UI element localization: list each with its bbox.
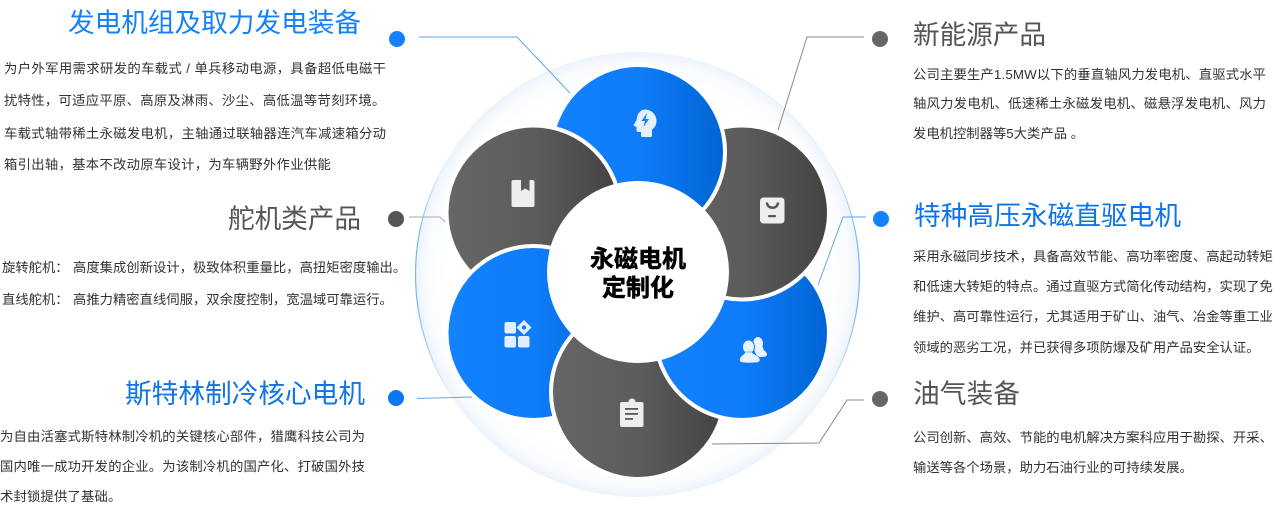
connector: top-right gray xyxy=(778,37,864,130)
panel: generator sets xyxy=(4,8,386,172)
petal: top blue xyxy=(553,67,723,237)
heading: 斯特林制冷核心电机 xyxy=(125,379,365,409)
icon: bookmark box xyxy=(512,180,534,207)
dot: bottom-right xyxy=(872,391,888,407)
text block: 旋转舵机： xyxy=(2,260,69,275)
dot: mid-right xyxy=(873,211,889,227)
panel: stirling cooler motors xyxy=(0,379,365,504)
panel: steering gear xyxy=(2,204,406,307)
text block xyxy=(913,248,1273,355)
heading: 发电机组及取力发电装备 xyxy=(68,8,361,38)
text block: 维护、高可靠性运行，尤其适用于矿山、油气、冶金等重工业 xyxy=(913,308,1273,324)
heading: 新能源产品 xyxy=(913,20,1046,50)
text block: 国内唯一成功开发的企业。为该制冷机的国产化、打破国外技 xyxy=(0,458,365,474)
text block: 轴风力发电机、低速稀土永磁发电机、磁悬浮发电机、风力 xyxy=(913,96,1266,111)
center title xyxy=(590,246,686,302)
text block xyxy=(4,60,386,172)
panel: oil and gas equipment xyxy=(913,379,1273,475)
center title: 定制化 xyxy=(602,275,674,302)
petal: top blue overlap xyxy=(625,67,727,210)
connector: bottom-right gray xyxy=(712,400,864,444)
text block: 发电机控制器等5大类产品 。 xyxy=(913,125,1084,141)
dot: top-left xyxy=(389,31,405,47)
center title: 永磁电机 xyxy=(590,246,686,273)
text block: 箱引出轴，基本不改动原车设计，为车辆野外作业供能 xyxy=(4,156,331,172)
center white circle xyxy=(547,181,729,363)
text block xyxy=(0,428,365,504)
text block: 车载式轴带稀土永磁发电机，主轴通过联轴器连汽车减速箱分动 xyxy=(4,125,386,141)
connector: mid-right blue xyxy=(818,217,866,285)
icon: tablet smile xyxy=(760,198,784,224)
connector: mid-left gray xyxy=(409,217,445,222)
text block xyxy=(2,259,406,307)
icon: app grid with diamond xyxy=(504,320,532,348)
text block: 直线舵机： xyxy=(2,292,69,307)
dot: mid-left xyxy=(388,211,404,227)
petal: lower-right blue xyxy=(657,248,827,418)
text block: 术封锁提供了基础。 xyxy=(0,489,121,504)
text block: 扰特性，可适应平原、高原及淋雨、沙尘、高低温等苛刻环境。 xyxy=(4,92,386,108)
petal: bottom dark xyxy=(553,307,723,477)
text block xyxy=(913,67,1266,141)
text block: 领域的恶劣工况，并已获得多项防爆及矿用产品安全认证。 xyxy=(913,339,1260,355)
text block xyxy=(913,429,1273,475)
heading: 油气装备 xyxy=(913,379,1020,409)
text block: 为自由活塞式斯特林制冷机的关键核心部件，猎鹰科技公司为 xyxy=(0,428,365,444)
text block: 高度集成创新设计，极致体积重量比，高扭矩密度输出。 xyxy=(73,259,406,275)
dot: top-right xyxy=(872,31,888,47)
connector: bottom-left blue xyxy=(417,397,472,398)
icon: head with bolt xyxy=(634,110,656,137)
icon: clipboard xyxy=(620,398,644,427)
text block: 输送等各个场景，助力石油行业的可持续发展。 xyxy=(913,459,1193,475)
heading: 舵机类产品 xyxy=(228,204,361,234)
text block: 和低速大转矩的特点。通过直驱方式简化传动结构，实现了免 xyxy=(913,278,1273,294)
central flower diagram xyxy=(415,52,860,497)
petal: lower-left blue xyxy=(448,248,618,418)
petal: upper-left dark xyxy=(448,128,618,298)
heading: 特种高压永磁直驱电机 xyxy=(914,201,1181,231)
panel: new energy products xyxy=(913,20,1266,141)
text block: 高推力精密直线伺服，双余度控制，宽温域可靠运行。 xyxy=(73,291,393,307)
text block: 采用永磁同步技术，具备高效节能、高功率密度、高起动转矩 xyxy=(913,248,1273,264)
text block: 为户外军用需求研发的车载式 / 单兵移动电源，具备超低电磁干 xyxy=(4,60,386,76)
outer glow ring xyxy=(415,52,860,497)
dot: bottom-left xyxy=(388,390,404,406)
panel: special high-voltage PM direct drive motors xyxy=(913,201,1273,355)
text block: 公司创新、高效、节能的电机解决方案科应用于勘探、开采、 xyxy=(913,429,1273,445)
icon: users xyxy=(740,337,767,363)
petal: upper-right dark xyxy=(657,128,827,298)
connector: top-left blue xyxy=(419,37,570,93)
text block: 公司主要生产1.5MW以下的垂直轴风力发电机、直驱式水平 xyxy=(913,67,1266,82)
